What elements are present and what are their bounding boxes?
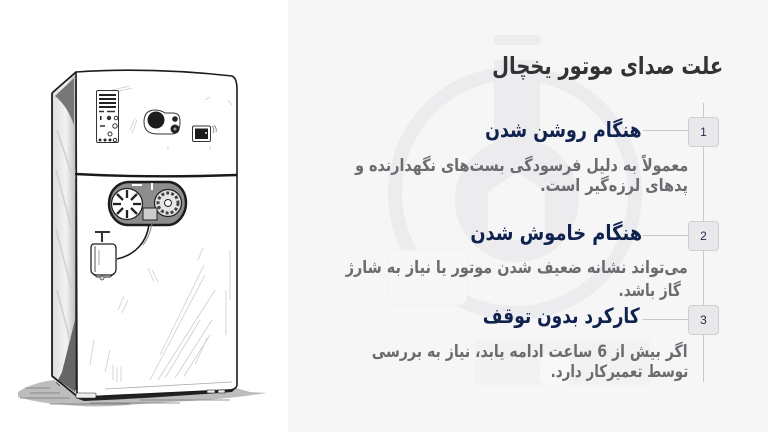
step 3 text [372, 342, 688, 382]
step 3 text: اگر بیش از 6 ساعت ادامه یابد، نیاز به بررسی [372, 342, 688, 362]
fridge body [52, 70, 237, 397]
step 1 text: پدهای لرزه‌گیر است. [540, 176, 688, 196]
step 1 badge [688, 117, 719, 147]
fridge feet [56, 382, 225, 398]
door highlights [90, 86, 232, 382]
step 3 connector [643, 319, 688, 320]
step 1 heading: هنگام روشن شدن [485, 118, 642, 142]
step 3 badge [688, 305, 719, 335]
step 2 heading: هنگام خاموش شدن [470, 221, 642, 245]
timeline [703, 103, 704, 382]
step 2 text: می‌تواند نشانه ضعیف شدن موتور یا نیاز به شارژ [346, 258, 688, 278]
step 2 badge [688, 221, 719, 251]
step 2 badge: 2 [700, 229, 707, 243]
step 3 badge: 3 [700, 313, 707, 327]
step 1 text: معمولاً به دلیل فرسودگی بست‌های نگهدارنده و [355, 156, 688, 176]
step 2 text: گاز باشد. [619, 281, 681, 301]
panel: fridge illustration [18, 69, 266, 406]
step 1 text [354, 154, 688, 196]
floor shadow [18, 380, 267, 406]
panel: text background [288, 0, 768, 432]
motor assembly [109, 182, 186, 225]
control panel [96, 90, 118, 142]
step 3 text: توسط تعمیرکار دارد. [550, 362, 688, 382]
cable [117, 224, 152, 259]
watermark logo [388, 35, 642, 320]
capacitor relay [91, 232, 116, 280]
step 2 connector [643, 235, 688, 236]
step 2 text [345, 258, 688, 301]
title: علت صدای موتور یخچال [492, 52, 723, 80]
switch [192, 125, 216, 142]
dial unit [144, 110, 180, 134]
step 3 heading: کارکرد بدون توقف [483, 304, 640, 328]
step 1 badge: 1 [700, 125, 707, 139]
step 1 connector [643, 130, 688, 131]
